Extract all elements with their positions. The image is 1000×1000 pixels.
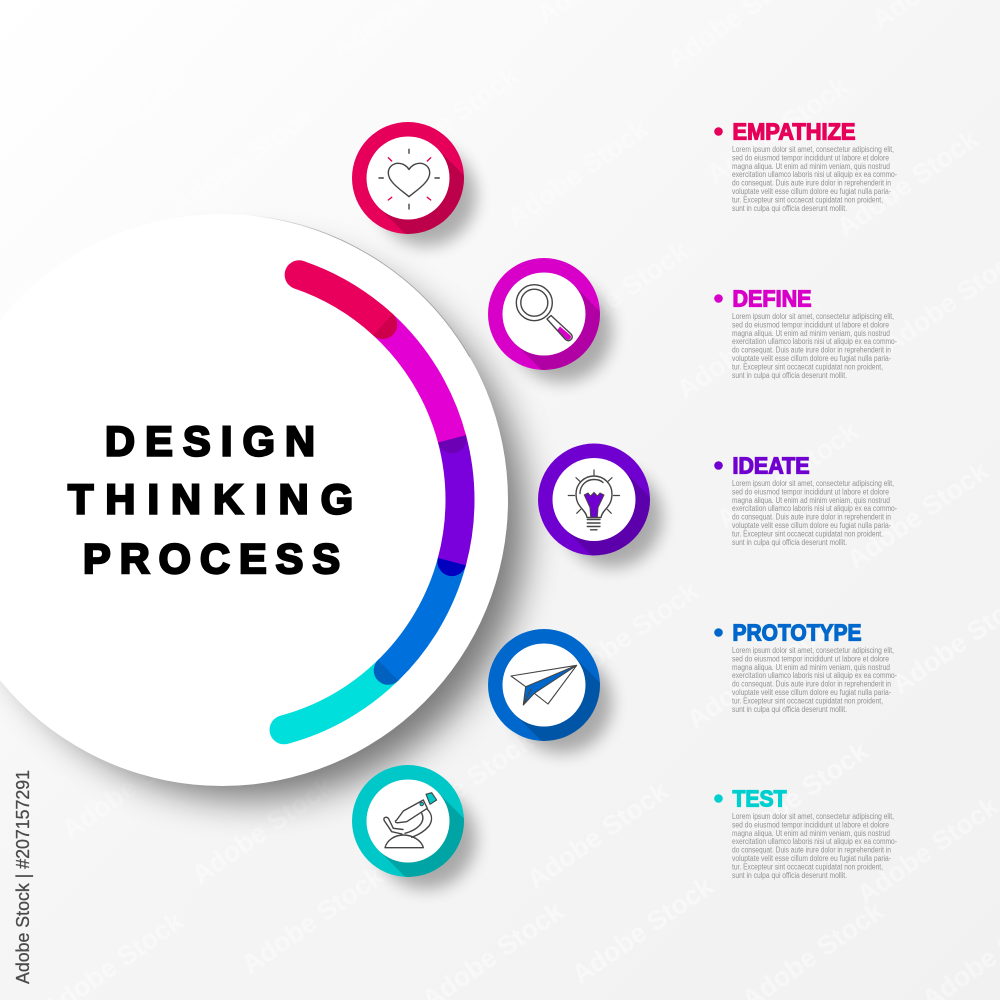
body text [732, 646, 897, 714]
heading: EMPATHIZE [732, 118, 856, 144]
text: Adobe Stock [831, 123, 984, 243]
text: Adobe Stock [521, 775, 674, 895]
body text [732, 145, 897, 213]
heading: TEST [732, 786, 786, 812]
body text: magna aliqua. Ut enim ad minim veniam, quis nostrud [732, 663, 890, 672]
body text: do consequat. Duis aute irure dolor in reprehenderit in [732, 179, 891, 188]
text: Adobe Stock [371, 60, 524, 180]
body text: sed do eiusmod tempor incididunt ut labore et dolore [732, 320, 889, 329]
body text: voluptate velit esse cillum dolore eu fugiat nulla paria- [732, 854, 891, 863]
body text: tur. Excepteur sint occaecat cupidatat non proident, [732, 862, 883, 871]
icon: microscope [384, 793, 437, 848]
body text [732, 812, 897, 880]
body text: voluptate velit esse cillum dolore eu fugiat nulla paria- [732, 354, 891, 363]
badge: prototype paper plane [488, 629, 620, 762]
body text: voluptate velit esse cillum dolore eu fugiat nulla paria- [732, 521, 891, 530]
text: Adobe Stock [36, 65, 189, 185]
icon: magnifier [516, 285, 572, 341]
body text: Lorem ipsum dolor sit amet, consectetur adipiscing elit, [732, 312, 894, 321]
step: ideate [714, 452, 897, 547]
body text: magna aliqua. Ut enim ad minim veniam, quis nostrud [732, 329, 890, 338]
text: Adobe Stock [186, 770, 339, 890]
text: Adobe Stock [56, 725, 209, 845]
body text [732, 312, 897, 380]
badge: define magnifier [488, 258, 620, 390]
heading: DEFINE [732, 286, 812, 312]
body text: sed do eiusmod tempor incididunt ut labore et dolore [732, 654, 889, 663]
body text: tur. Excepteur sint occaecat cupidatat non proident, [732, 362, 883, 371]
step: empathize [714, 118, 897, 213]
body text: sunt in culpa qui officia deserunt mollit. [732, 705, 847, 714]
step: define [714, 286, 897, 380]
bullet [714, 127, 723, 136]
body text: do consequat. Duis aute irure dolor in reprehenderit in [732, 513, 891, 522]
text: Adobe Stock [721, 735, 874, 855]
body text: sed do eiusmod tempor incididunt ut labore et dolore [732, 487, 889, 496]
body text: exercitation ullamco laboris nisi ut aliquip ex ea commo- [732, 671, 897, 680]
panel: large white circle with shadow [0, 214, 526, 800]
bullet [714, 294, 723, 303]
body text: sunt in culpa qui officia deserunt mollit. [732, 371, 847, 380]
icon: light bulb [568, 470, 620, 530]
arc segment: empathize (red) [285, 260, 397, 339]
bullet [714, 794, 723, 803]
badge: test microscope [352, 765, 484, 898]
text: Adobe Stock [566, 870, 719, 990]
text: Adobe Stock [671, 285, 824, 405]
icon: paper plane [511, 665, 577, 705]
heading: IDEATE [732, 452, 810, 478]
title: THINKING [68, 476, 353, 522]
text: Adobe Stock [236, 860, 389, 980]
body text: voluptate velit esse cillum dolore eu fugiat nulla paria- [732, 688, 891, 697]
title: DESIGN [105, 418, 315, 464]
step: test [714, 786, 897, 880]
body text: do consequat. Duis aute irure dolor in reprehenderit in [732, 680, 891, 689]
body text: Lorem ipsum dolor sit amet, consectetur adipiscing elit, [732, 646, 894, 655]
arc segment: define (magenta) [383, 324, 466, 453]
body text: Lorem ipsum dolor sit amet, consectetur adipiscing elit, [732, 812, 894, 821]
text: Adobe Stock [386, 725, 539, 845]
body text: do consequat. Duis aute irure dolor in reprehenderit in [732, 846, 891, 855]
text: Adobe Stock [681, 615, 834, 735]
body text: do consequat. Duis aute irure dolor in reprehenderit in [732, 346, 891, 355]
body text: magna aliqua. Ut enim ad minim veniam, quis nostrud [732, 496, 890, 505]
body text: sed do eiusmod tempor incididunt ut labore et dolore [732, 820, 889, 829]
watermark id: Adobe Stock | #207157291 [13, 770, 33, 984]
body text: exercitation ullamco laboris nisi ut aliquip ex ea commo- [732, 337, 897, 346]
body text: sunt in culpa qui officia deserunt mollit. [732, 538, 847, 547]
badge: ideate bulb [538, 444, 670, 576]
text: Adobe Stock [711, 415, 864, 535]
body text: tur. Excepteur sint occaecat cupidatat non proident, [732, 696, 883, 705]
arc segment: test (teal) [270, 670, 388, 744]
bullet [714, 461, 723, 470]
step: prototype [714, 620, 897, 714]
title [68, 418, 353, 582]
body text: exercitation ullamco laboris nisi ut aliquip ex ea commo- [732, 170, 897, 179]
text: Adobe Stock [851, 790, 1000, 910]
body text [732, 479, 897, 547]
text: Adobe Stock [166, 100, 319, 220]
body text: voluptate velit esse cillum dolore eu fugiat nulla paria- [732, 187, 891, 196]
body text: tur. Excepteur sint occaecat cupidatat non proident, [732, 529, 883, 538]
body text: sunt in culpa qui officia deserunt mollit. [732, 871, 847, 880]
heading: PROTOTYPE [732, 620, 862, 646]
arc segment: ideate (purple) [437, 439, 466, 576]
text: Adobe Stock [541, 235, 694, 355]
body text: Lorem ipsum dolor sit amet, consectetur adipiscing elit, [732, 145, 894, 154]
body text: magna aliqua. Ut enim ad minim veniam, quis nostrud [732, 829, 890, 838]
body text: exercitation ullamco laboris nisi ut aliquip ex ea commo- [732, 504, 897, 513]
body text: sed do eiusmod tempor incididunt ut labore et dolore [732, 153, 889, 162]
title: PROCESS [83, 535, 340, 582]
body text: tur. Excepteur sint occaecat cupidatat non proident, [732, 195, 883, 204]
text: Adobe Stock [841, 455, 994, 575]
badge: empathize heart [352, 122, 484, 254]
body text: Lorem ipsum dolor sit amet, consectetur adipiscing elit, [732, 479, 894, 488]
body text: magna aliqua. Ut enim ad minim veniam, quis nostrud [732, 162, 890, 171]
bullet [714, 628, 723, 637]
segmented arc [270, 260, 466, 744]
text: Adobe Stock [701, 70, 854, 190]
text: Adobe Stock [551, 575, 704, 695]
text: Adobe Stock [501, 113, 654, 233]
icon: heart [379, 149, 439, 209]
body text: exercitation ullamco laboris nisi ut aliquip ex ea commo- [732, 837, 897, 846]
body text: sunt in culpa qui officia deserunt mollit. [732, 204, 847, 213]
arc segment: prototype (blue) [374, 562, 452, 685]
